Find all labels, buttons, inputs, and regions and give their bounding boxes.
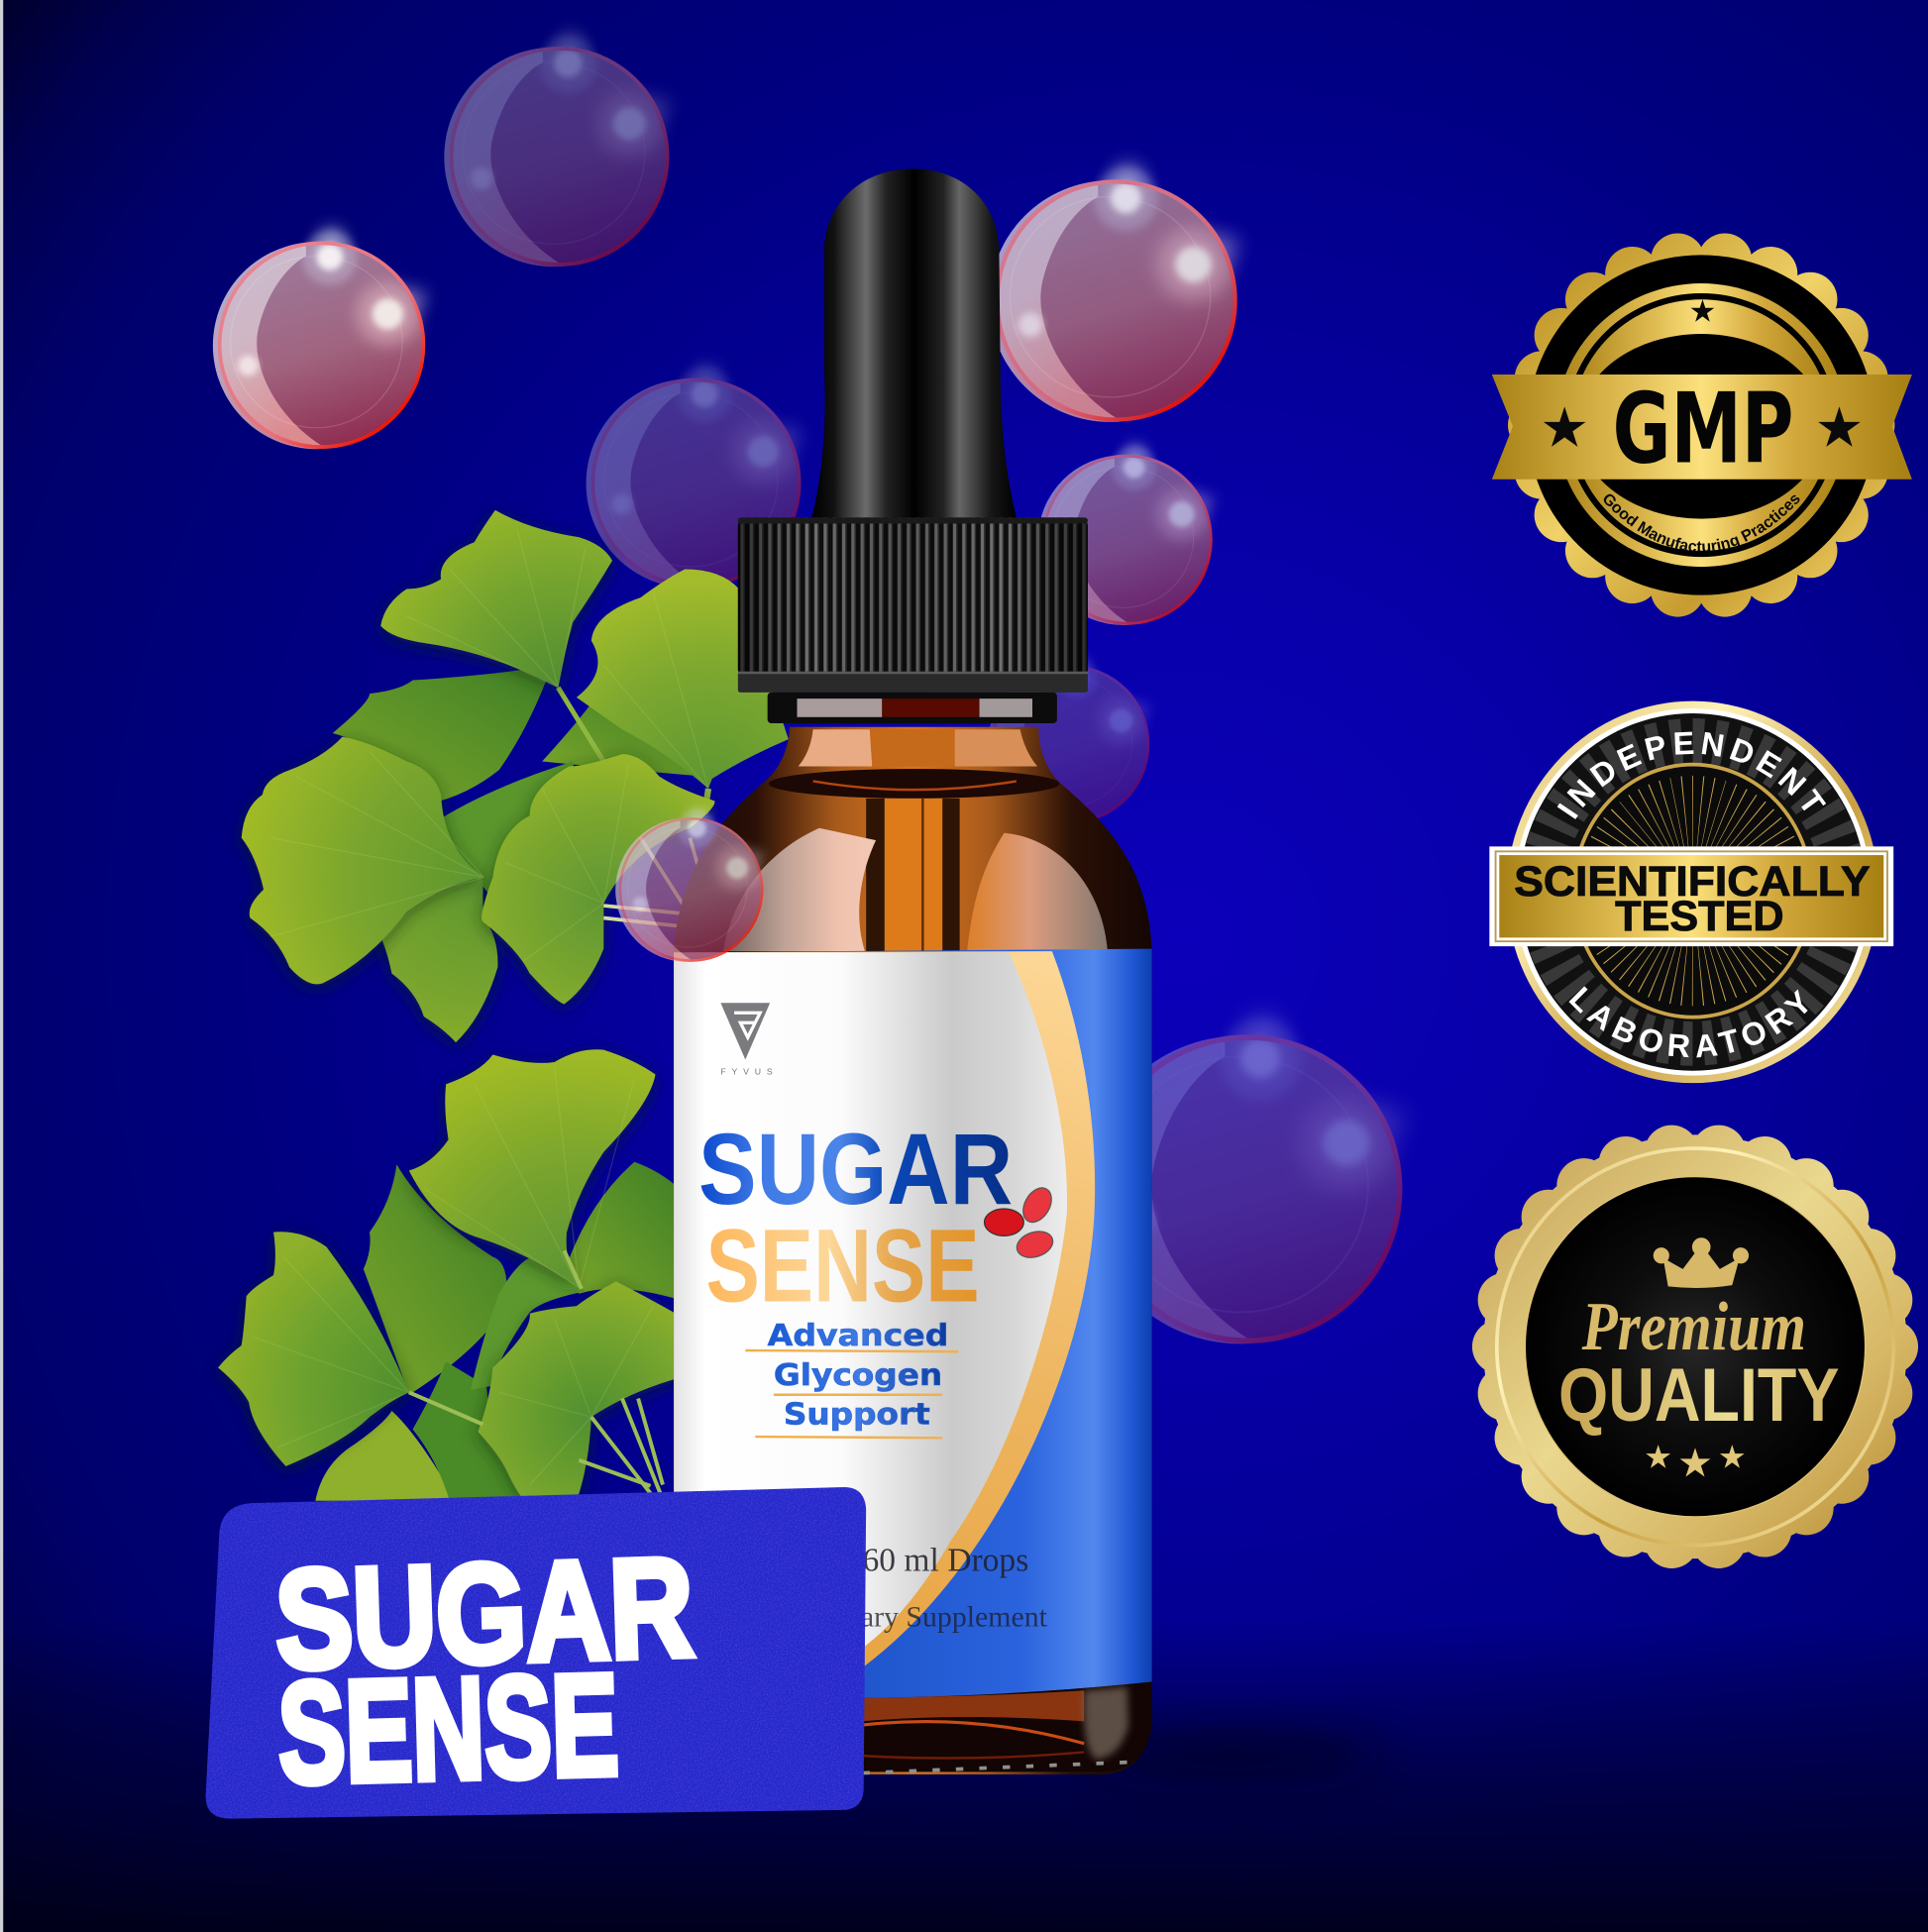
outer ring [1507, 701, 1878, 1083]
tagline: Glycogen [774, 1358, 942, 1393]
bottle ground shadow [1084, 1735, 1380, 1774]
supplement text: Dietary Supplement [810, 1601, 1048, 1634]
volume text: 60 ml Drops [862, 1543, 1028, 1579]
badge: GMP [1492, 234, 1912, 617]
curved text bottom [1528, 892, 1858, 1057]
scalloped edge [1529, 253, 1874, 597]
scalloped edge [1483, 1134, 1907, 1558]
badge: GMP: Good Manufacturing Practices [1603, 493, 1799, 552]
leaf: centre back [471, 1256, 586, 1390]
tagline: Advanced [768, 1319, 948, 1353]
neck ring [768, 693, 1057, 723]
ribbon [1492, 375, 1912, 480]
banner [1489, 846, 1893, 946]
badge: scientifically tested: LABORATORY [1569, 986, 1807, 1058]
curved caption [1564, 454, 1838, 552]
label blue band [674, 949, 1152, 1698]
dropper bulb [810, 168, 1018, 522]
leaf: bottom left [315, 1411, 456, 1501]
shoulder highlights [723, 828, 876, 951]
leaf stems behind bubble [603, 838, 702, 926]
bubble: large lower right [1086, 1014, 1407, 1343]
sticker: product name card [206, 1487, 866, 1819]
black centre [1525, 1177, 1866, 1517]
top star [1691, 299, 1714, 322]
leaf: centre front [482, 754, 714, 1005]
amber tube [866, 799, 960, 956]
bubble: behind shoulder [988, 654, 1152, 823]
leaf: left [218, 1232, 409, 1466]
rings [1528, 255, 1875, 595]
bubble: right of dropper pink [990, 163, 1240, 422]
sticker subtitle: SENSE [276, 1644, 620, 1814]
label orange arc [674, 951, 1095, 1698]
leaf: behind right [565, 1162, 680, 1300]
bottle base [862, 1682, 1152, 1773]
ribbon star right [1818, 406, 1861, 447]
bubble: behind cap purple [587, 364, 803, 589]
GMP text: GMP [1613, 373, 1793, 485]
curved text top [1554, 754, 1831, 892]
leaf: large left [242, 737, 484, 984]
banner text: SCIENTIFICALLY [1514, 858, 1871, 905]
bubble: right of cap [1038, 443, 1215, 625]
leaf: right behind cap [542, 699, 702, 776]
gold ring [1497, 1148, 1893, 1546]
ginkgo leaves: upper cluster [242, 510, 789, 1042]
label white panel [674, 952, 1067, 1698]
leaf: behind left [364, 1164, 506, 1395]
bottle [674, 168, 1152, 1774]
Premium script: Premium [1581, 1289, 1806, 1365]
leaf: top [409, 1049, 656, 1288]
leaf stems [409, 1250, 663, 1493]
bubble in front of leaf and bottle [615, 807, 765, 962]
ribbon star left [1544, 406, 1585, 447]
shoulder dark band [769, 769, 1059, 799]
leaf: small middle [434, 762, 574, 906]
brand logo: FYVUS [720, 1066, 773, 1076]
blood cells icon [985, 1183, 1057, 1262]
sticker title: SUGAR [273, 1530, 696, 1699]
leaf: lower [370, 877, 497, 1042]
bubbles behind the bottle [213, 32, 1407, 1343]
leaf: front right [478, 1281, 680, 1501]
bubble: left pink [213, 227, 428, 449]
sticker panel [206, 1487, 866, 1819]
ginkgo leaves: lower cluster [218, 1049, 680, 1501]
leaf: top [380, 510, 612, 688]
product name on label: SUGAR [698, 1113, 1013, 1226]
inner sunburst [1572, 763, 1813, 1019]
badge: premium quality [1483, 1134, 1907, 1558]
crown icon [1654, 1237, 1749, 1288]
leaf veins [271, 530, 708, 961]
glass body [674, 727, 1152, 1774]
stars [1646, 1445, 1745, 1477]
cap [738, 517, 1088, 693]
leaf: behind left [333, 666, 552, 804]
banner text line two: TESTED [1615, 893, 1784, 939]
bubble: top dark [444, 32, 673, 267]
leaf: upper right large [577, 570, 789, 789]
brand logo [720, 1003, 773, 1076]
tagline: Support [784, 1398, 930, 1433]
leaf: bottom centre [413, 1361, 523, 1501]
label [674, 949, 1152, 1698]
QUALITY: QUALITY [1558, 1353, 1839, 1438]
product name second line: SENSE [705, 1208, 980, 1324]
badge: scientifically tested: INDEPENDENT [1557, 731, 1827, 819]
tagline [745, 1319, 958, 1438]
badge: scientifically tested [1489, 701, 1894, 1084]
leaf stem [558, 688, 603, 762]
leaf veins [253, 1066, 653, 1485]
neck highlights [799, 729, 1037, 767]
